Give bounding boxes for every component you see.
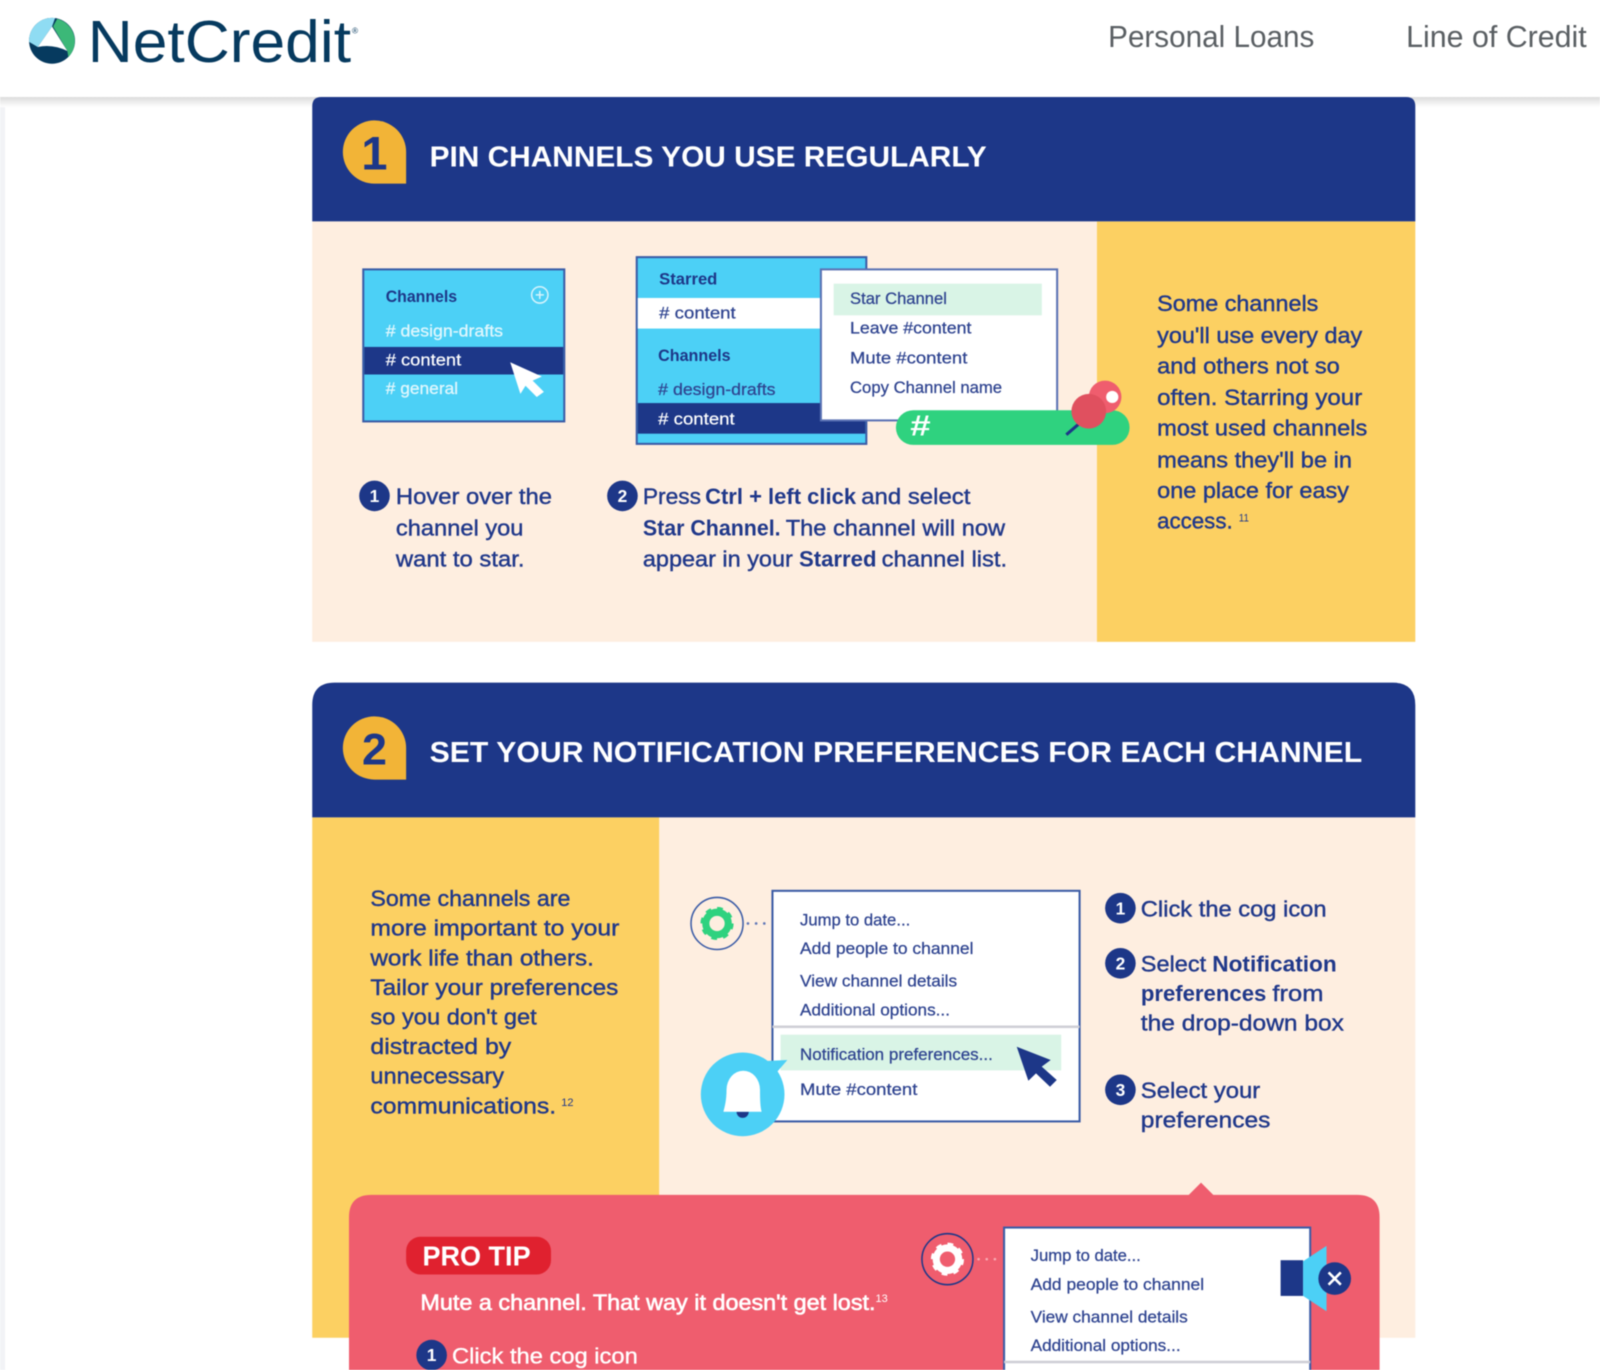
starred channels mockup: # content xyxy=(659,304,736,322)
panel: pro tip xyxy=(349,1183,1380,1370)
heading 1: PIN CHANNELS YOU USE REGULARLY xyxy=(430,141,987,173)
notification menu: Notification preferences... xyxy=(800,1046,993,1064)
step 1 text: want to star. xyxy=(395,546,524,571)
panel 1: pin channels xyxy=(312,97,1415,642)
mute menu: Add people to channel xyxy=(1031,1276,1204,1294)
channel list mockup: # content xyxy=(386,351,462,369)
yellow column text 1: access. xyxy=(1157,509,1233,534)
yellow column text 1 xyxy=(1157,291,1367,534)
heading 2: SET YOUR NOTIFICATION PREFERENCES FOR EACH CHANNEL xyxy=(430,737,1362,769)
step 2 text xyxy=(607,481,1007,571)
notification menu xyxy=(772,891,1080,1121)
yellow column text 2 xyxy=(369,886,620,1118)
starred channels mockup xyxy=(637,257,866,444)
yellow column text 1: you'll use every day xyxy=(1157,323,1363,348)
mute menu: Additional options... xyxy=(1031,1337,1181,1355)
step 2 text: Starred xyxy=(799,546,877,571)
navy cursor xyxy=(1017,1047,1057,1087)
step 1 text: 1 xyxy=(370,486,380,506)
channel list mockup: # design-drafts xyxy=(386,323,503,341)
step list: preferences xyxy=(1141,981,1266,1006)
nav: Personal Loans: Personal Loans xyxy=(1108,20,1314,54)
step 2 text: channel list. xyxy=(882,546,1007,571)
yellow column text 2: work life than others. xyxy=(369,945,594,970)
yellow column text 1: 11 xyxy=(1239,512,1249,524)
badge 2 xyxy=(343,716,406,780)
step 2 text: appear in your xyxy=(643,546,793,571)
yellow column text 2: unnecessary xyxy=(370,1064,505,1089)
star channel menu: Star Channel xyxy=(850,290,947,308)
mute menu: Jump to date... xyxy=(1031,1247,1141,1265)
mute menu: View channel details xyxy=(1031,1308,1188,1326)
panel 2: notification preferences xyxy=(312,683,1415,1338)
step list: Click the cog icon xyxy=(1141,896,1327,921)
pro tip badge xyxy=(406,1237,551,1274)
panel 2 body xyxy=(659,817,1415,1338)
yellow column text 1: and others not so xyxy=(1157,353,1340,378)
step 2 text: Star Channel. xyxy=(643,516,781,541)
star channel menu: Leave #content xyxy=(850,320,972,338)
yellow column text 1: most used channels xyxy=(1157,416,1367,441)
yellow column text 1: means they'll be in xyxy=(1157,447,1352,472)
notification menu: View channel details xyxy=(800,973,957,991)
white cursor xyxy=(510,362,544,397)
panel 1 header xyxy=(312,97,1415,221)
star channel menu: Mute #content xyxy=(850,349,968,367)
star channel menu xyxy=(821,269,1057,420)
panel 2 yellow column xyxy=(312,817,659,1338)
step 2 text: and select xyxy=(861,484,971,509)
yellow column text 1: often. Starring your xyxy=(1157,385,1363,410)
step list: 1 xyxy=(1116,898,1126,918)
yellow column text 2: communications. xyxy=(370,1093,556,1118)
channel list mockup: Channels xyxy=(386,288,457,306)
yellow column text 2: Tailor your preferences xyxy=(370,975,618,1000)
step 2 text: The channel will now xyxy=(786,516,1006,541)
step list: from xyxy=(1272,981,1323,1006)
step 1 text xyxy=(359,481,552,571)
panel 1 body xyxy=(312,221,1097,642)
icon: muted speaker xyxy=(1281,1246,1351,1311)
yellow column text 2: Some channels are xyxy=(370,886,570,911)
pro tip step 1: Click the cog icon xyxy=(452,1343,638,1368)
yellow column text 1: one place for easy xyxy=(1157,478,1350,503)
pro tip step 1: 1 xyxy=(427,1345,437,1365)
yellow column text 1: Some channels xyxy=(1157,291,1318,316)
nav: Line of Credit: Line of Credit xyxy=(1406,20,1587,54)
step list: 2 xyxy=(1116,953,1125,973)
mute menu xyxy=(1004,1228,1310,1370)
starred channels mockup: Channels xyxy=(658,347,731,365)
step list: Notification xyxy=(1212,951,1337,976)
badge 2: 2 xyxy=(362,723,387,774)
notification menu: Jump to date... xyxy=(800,912,910,930)
notification menu: Additional options... xyxy=(800,1001,950,1019)
channel list mockup xyxy=(363,269,564,421)
NetCredit logo: NetCredit xyxy=(88,8,351,75)
step 1 text: channel you xyxy=(396,516,523,541)
pro tip text: Mute a channel. That way it doesn't get lost. xyxy=(420,1290,876,1315)
icon: push pin xyxy=(1066,381,1121,435)
starred channels mockup: # design-drafts xyxy=(658,381,776,399)
pro tip badge: PRO TIP xyxy=(422,1240,531,1271)
green pinned channel bar xyxy=(896,410,1130,445)
green pinned channel bar: # xyxy=(910,411,931,443)
icon: green cog xyxy=(691,897,766,949)
step list: the drop-down box xyxy=(1141,1011,1344,1036)
badge 1: 1 xyxy=(361,127,388,179)
step list xyxy=(1105,893,1344,1133)
NetCredit logo: ® xyxy=(352,27,358,36)
channel list mockup: # general xyxy=(386,380,458,398)
site header xyxy=(0,0,1600,97)
yellow column text 2: so you don't get xyxy=(370,1004,538,1029)
step 2 text: Ctrl + left click xyxy=(705,484,857,509)
panel 2 header xyxy=(312,683,1415,817)
badge 1 xyxy=(343,120,406,184)
notification menu: Mute #content xyxy=(800,1081,918,1099)
step 1 text: Hover over the xyxy=(396,484,552,509)
pro tip step 1 xyxy=(416,1340,638,1370)
icon: bell bubble xyxy=(701,1053,787,1136)
starred channels mockup: # content xyxy=(658,410,735,428)
star channel menu: Copy Channel name xyxy=(850,379,1002,397)
step list: 3 xyxy=(1116,1080,1126,1100)
yellow column text 2: 12 xyxy=(561,1097,573,1109)
step 2 text: Press xyxy=(643,484,701,509)
yellow column text 2: distracted by xyxy=(370,1034,512,1059)
pro tip text: 13 xyxy=(876,1293,888,1305)
icon: white cog xyxy=(922,1234,996,1285)
step 2 text: 2 xyxy=(618,486,627,506)
step list: Select your xyxy=(1141,1078,1261,1103)
yellow column text 2: more important to your xyxy=(370,916,620,941)
starred channels mockup: Starred xyxy=(659,271,717,289)
step list: preferences xyxy=(1141,1108,1270,1133)
notification menu: Add people to channel xyxy=(800,940,973,958)
step list: Select xyxy=(1141,951,1207,976)
panel 1 yellow column xyxy=(1097,221,1415,642)
